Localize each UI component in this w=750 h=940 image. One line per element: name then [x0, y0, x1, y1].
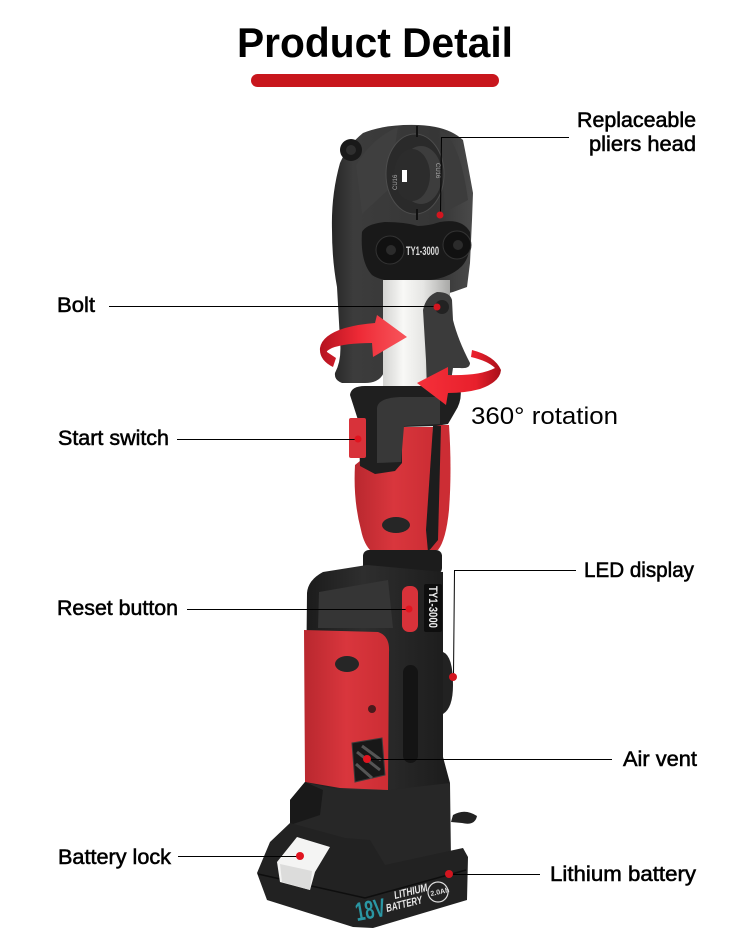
red handle	[355, 427, 433, 552]
title: Product Detail	[237, 19, 513, 66]
rotation arrow right	[417, 350, 501, 405]
title underline bar	[251, 74, 499, 87]
callout: bolt: Bolt	[57, 294, 95, 317]
battery: 18V	[353, 892, 388, 927]
grip: upper handle	[349, 386, 461, 574]
callout: bolt	[57, 294, 440, 317]
red rear strip	[430, 425, 450, 550]
battery	[257, 823, 468, 928]
lower body	[451, 812, 477, 824]
pliers head: CU16	[393, 174, 399, 190]
callout: LED display: LED display	[584, 559, 694, 582]
callout: LED display	[449, 559, 694, 681]
callout: air vent: Air vent	[623, 748, 697, 771]
main body	[290, 565, 477, 875]
callout: replaceable pliers head: Replaceable	[577, 109, 696, 132]
battery: 2.0Ah	[430, 887, 450, 898]
black grip stripe	[426, 426, 441, 552]
black collar	[350, 386, 461, 474]
callout: lithium battery: Lithium battery	[550, 863, 697, 886]
callout: air vent	[363, 748, 697, 771]
callout: lithium battery	[445, 863, 697, 886]
callout: replaceable pliers head	[436, 109, 696, 218]
callout: reset button: Reset button	[57, 597, 178, 620]
air vent	[352, 738, 385, 782]
battery: LITHIUM	[393, 882, 429, 902]
callout: battery lock	[58, 846, 304, 869]
callout: battery lock: Battery lock	[58, 846, 172, 869]
callout: start switch: Start switch	[58, 427, 169, 450]
pliers head: TY1-3000	[406, 244, 439, 258]
main body: TY1-3000	[426, 586, 440, 628]
pliers head: CU16	[434, 163, 440, 179]
battery: BATTERY	[385, 894, 425, 915]
hydraulic cylinder	[383, 280, 450, 390]
rotation arrow left	[320, 315, 407, 367]
die insert	[386, 134, 444, 214]
callout: start switch	[58, 427, 362, 450]
start switch	[349, 418, 366, 458]
pliers head	[332, 125, 473, 400]
callout: replaceable pliers head: pliers head	[589, 133, 696, 156]
callout: reset button	[57, 597, 412, 620]
product: crimping tool	[257, 125, 501, 928]
label: 360 rotation: 360° rotation	[471, 403, 618, 430]
